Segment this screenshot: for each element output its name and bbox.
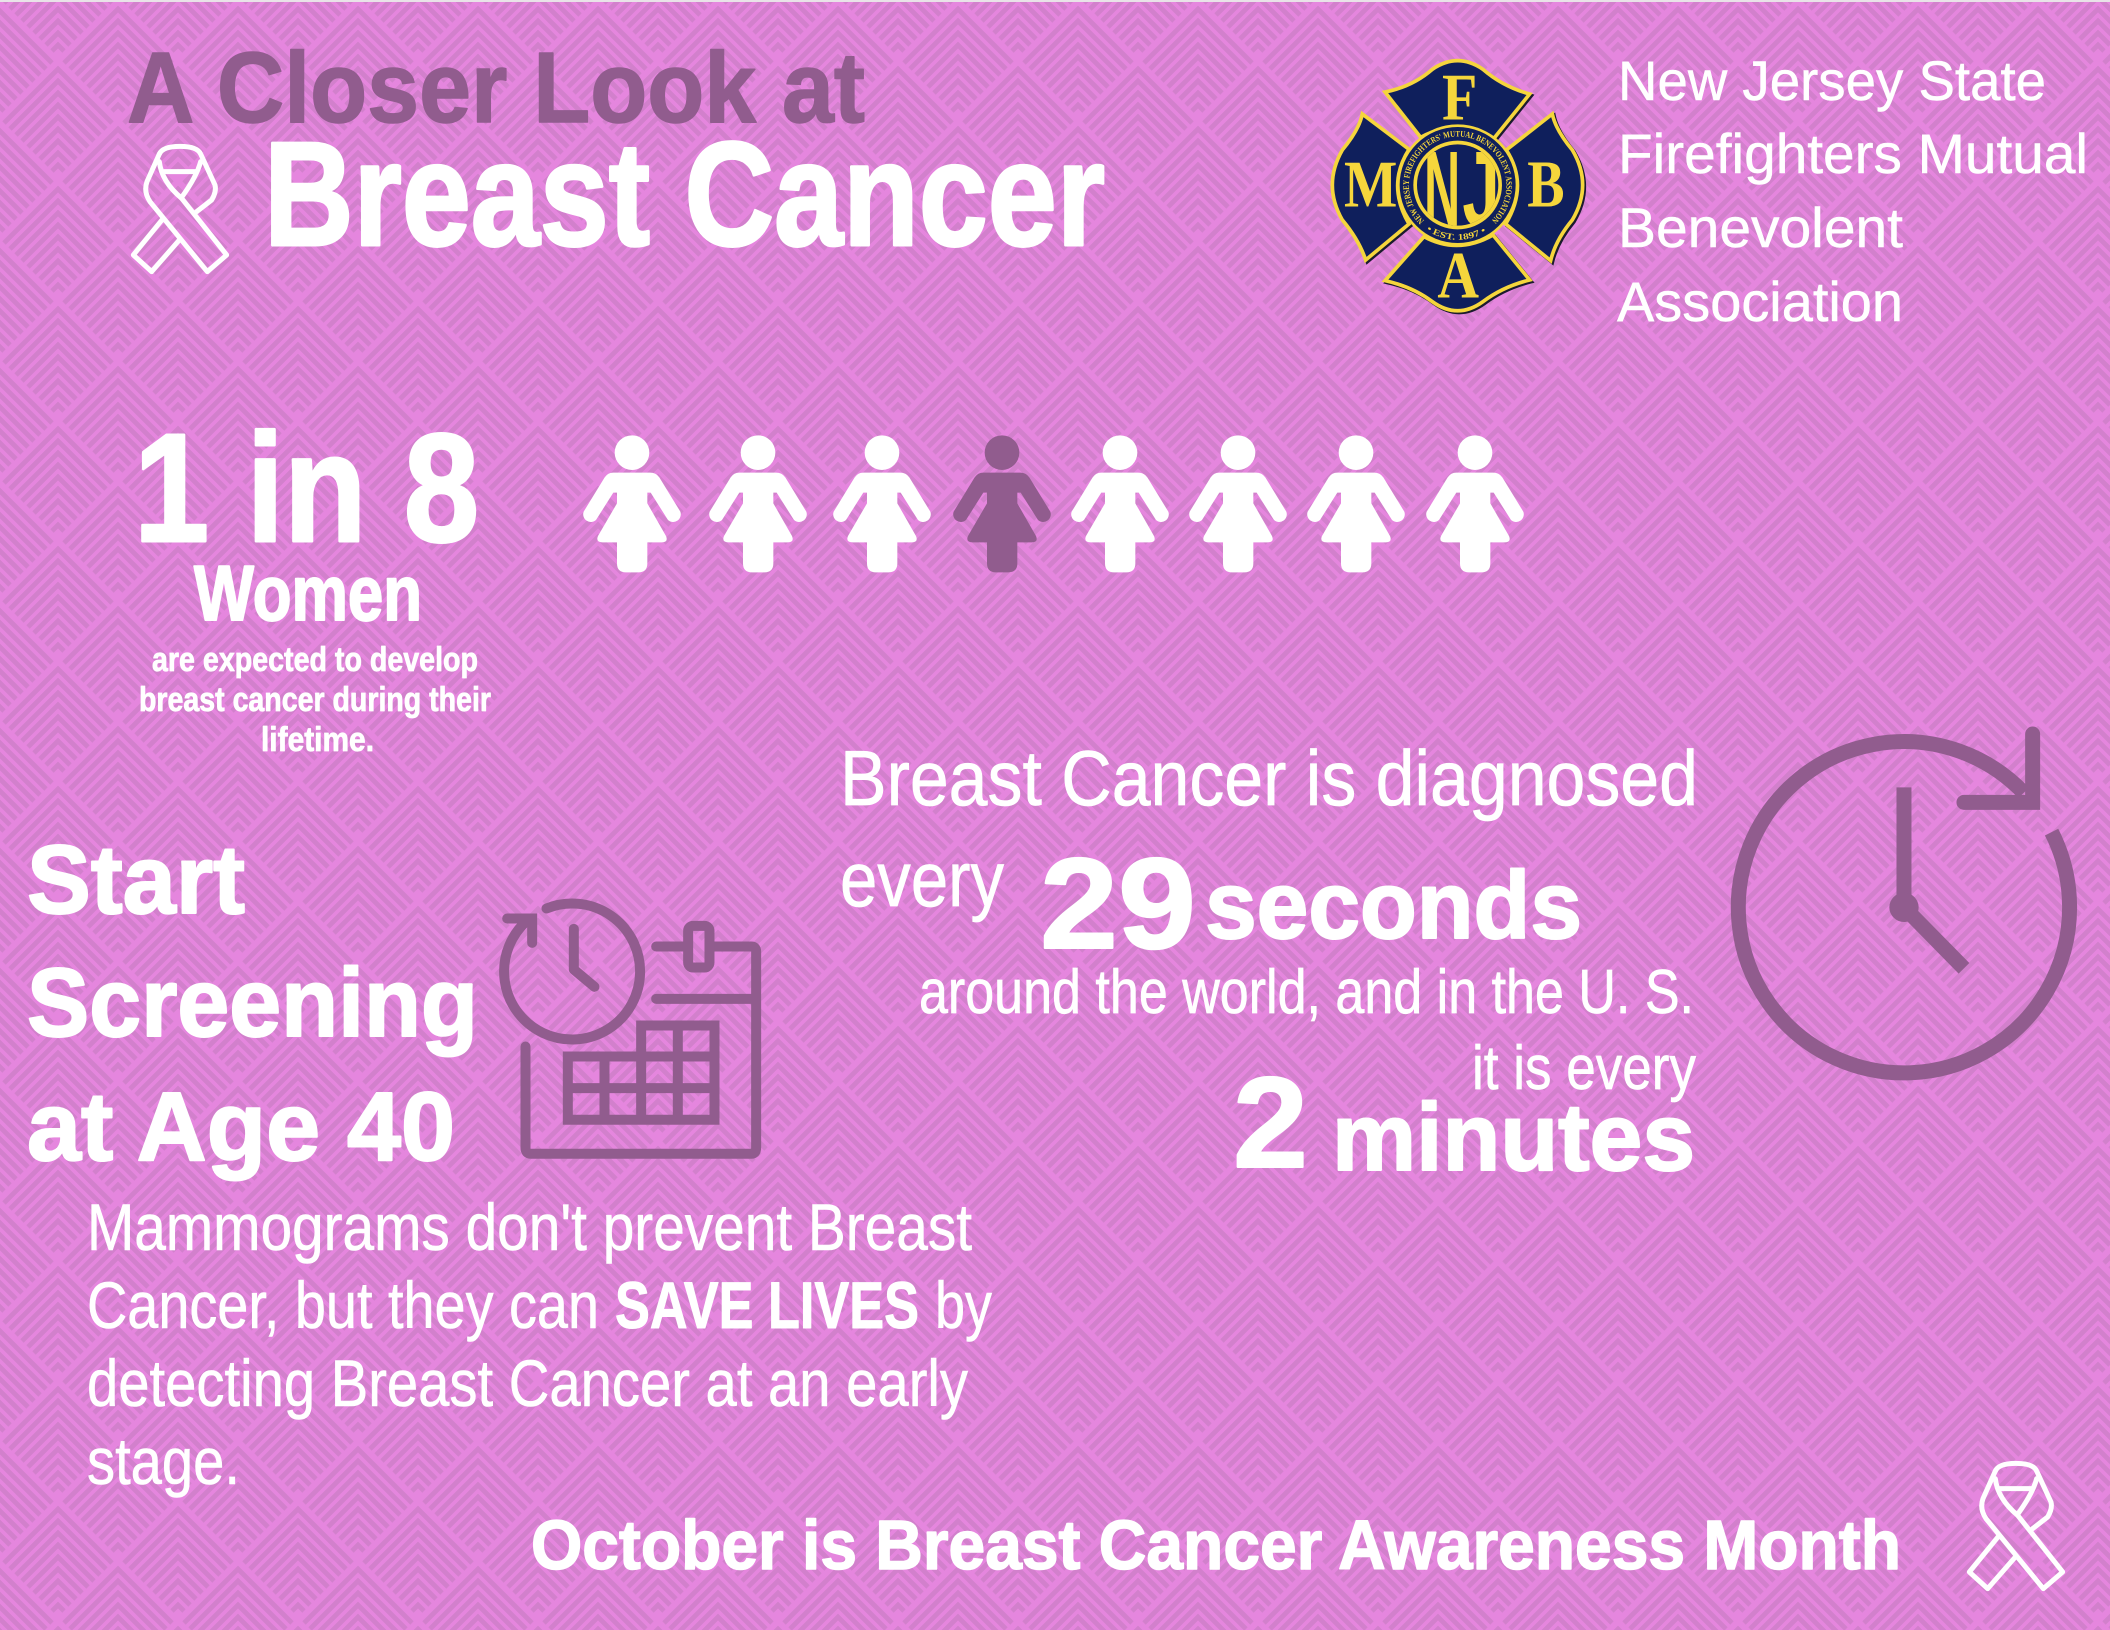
footer: awareness month: October is Breast Cancer Awareness Month [531, 1506, 1901, 1584]
text block: mammograms [87, 1190, 992, 1498]
logo letters F M B A [1344, 61, 1565, 313]
logo letters F M B A: A [1437, 240, 1479, 313]
statistic: 1 in 8 women [134, 402, 491, 759]
heading: Start Screening at Age 40: Start [27, 825, 245, 934]
logo centre seal: J [1462, 128, 1500, 248]
title line: A Closer Look at: A Closer Look at [127, 32, 865, 144]
logo centre seal: N [1424, 129, 1460, 248]
line: Breast Cancer is diagnosed: Breast Cancer is diagnosed [840, 734, 1698, 822]
logo shadow and arms [1332, 61, 1584, 312]
line: every 29 seconds: every [840, 835, 1004, 923]
description: lifetime. [261, 721, 374, 759]
logo centre seal: • EST. 1897 • [1428, 227, 1485, 240]
logo: FMBA Maltese cross badge [1330, 58, 1586, 314]
description [139, 641, 491, 759]
organisation name: Association [1617, 270, 1903, 333]
icon: awareness ribbon top [133, 146, 227, 272]
line: it is every: it is every [1472, 1034, 1696, 1103]
line: around the world: around the world, and in the U. S. [919, 958, 1694, 1027]
line: every 29 seconds: seconds [1205, 852, 1582, 959]
icon: clock and calendar [504, 903, 756, 1154]
title line: Breast Cancer: Breast Cancer [264, 112, 1105, 277]
logo letters F M B A: M [1344, 149, 1397, 222]
header: title block [127, 32, 1105, 277]
organisation name: Benevolent [1618, 196, 1903, 259]
description: are expected to develop [152, 641, 478, 679]
line: every 29 seconds [840, 832, 1582, 976]
heading: Start Screening at Age 40: Screening [27, 948, 478, 1057]
organisation name: Firefighters Mutual [1618, 122, 2088, 185]
statistic: diagnosis frequency [840, 734, 1698, 1195]
text block: mammograms: stage. [87, 1424, 240, 1498]
heading: Start Screening at Age 40: at Age 40 [27, 1072, 455, 1181]
line: every 29 seconds: 29 [1040, 832, 1196, 976]
text block: mammograms: Mammograms don't prevent Breast [87, 1190, 972, 1264]
text block: mammograms: detecting Breast Cancer at an early [87, 1346, 968, 1420]
line: 2 minutes: 2 [1233, 1051, 1308, 1195]
line: 2 minutes: minutes [1332, 1084, 1695, 1191]
organisation name: New Jersey State [1618, 49, 2046, 112]
description: breast cancer during their [139, 681, 491, 719]
text block: mammograms: SAVE LIVES [615, 1268, 919, 1342]
organisation name [1617, 49, 2088, 333]
icon: awareness ribbon bottom [1969, 1463, 2063, 1589]
text block: mammograms: Cancer, but they can [87, 1268, 599, 1342]
logo centre seal: NEW JERSEY FIREFIGHTERS' MUTUAL BENEVOLENT ASSOCIATION [1403, 130, 1512, 225]
big number: 1 in 8 [134, 402, 479, 574]
line: 2 minutes [1233, 1051, 1695, 1195]
icon: large clock with arrow [1738, 734, 2070, 1073]
logo letters F M B A: B [1527, 149, 1565, 222]
women label: Women [194, 549, 422, 637]
heading: Start Screening at Age 40 [27, 825, 478, 1181]
text block: mammograms: by [935, 1268, 992, 1342]
logo letters F M B A: F [1442, 61, 1477, 134]
pictogram: eight women, one highlighted [583, 435, 1524, 572]
